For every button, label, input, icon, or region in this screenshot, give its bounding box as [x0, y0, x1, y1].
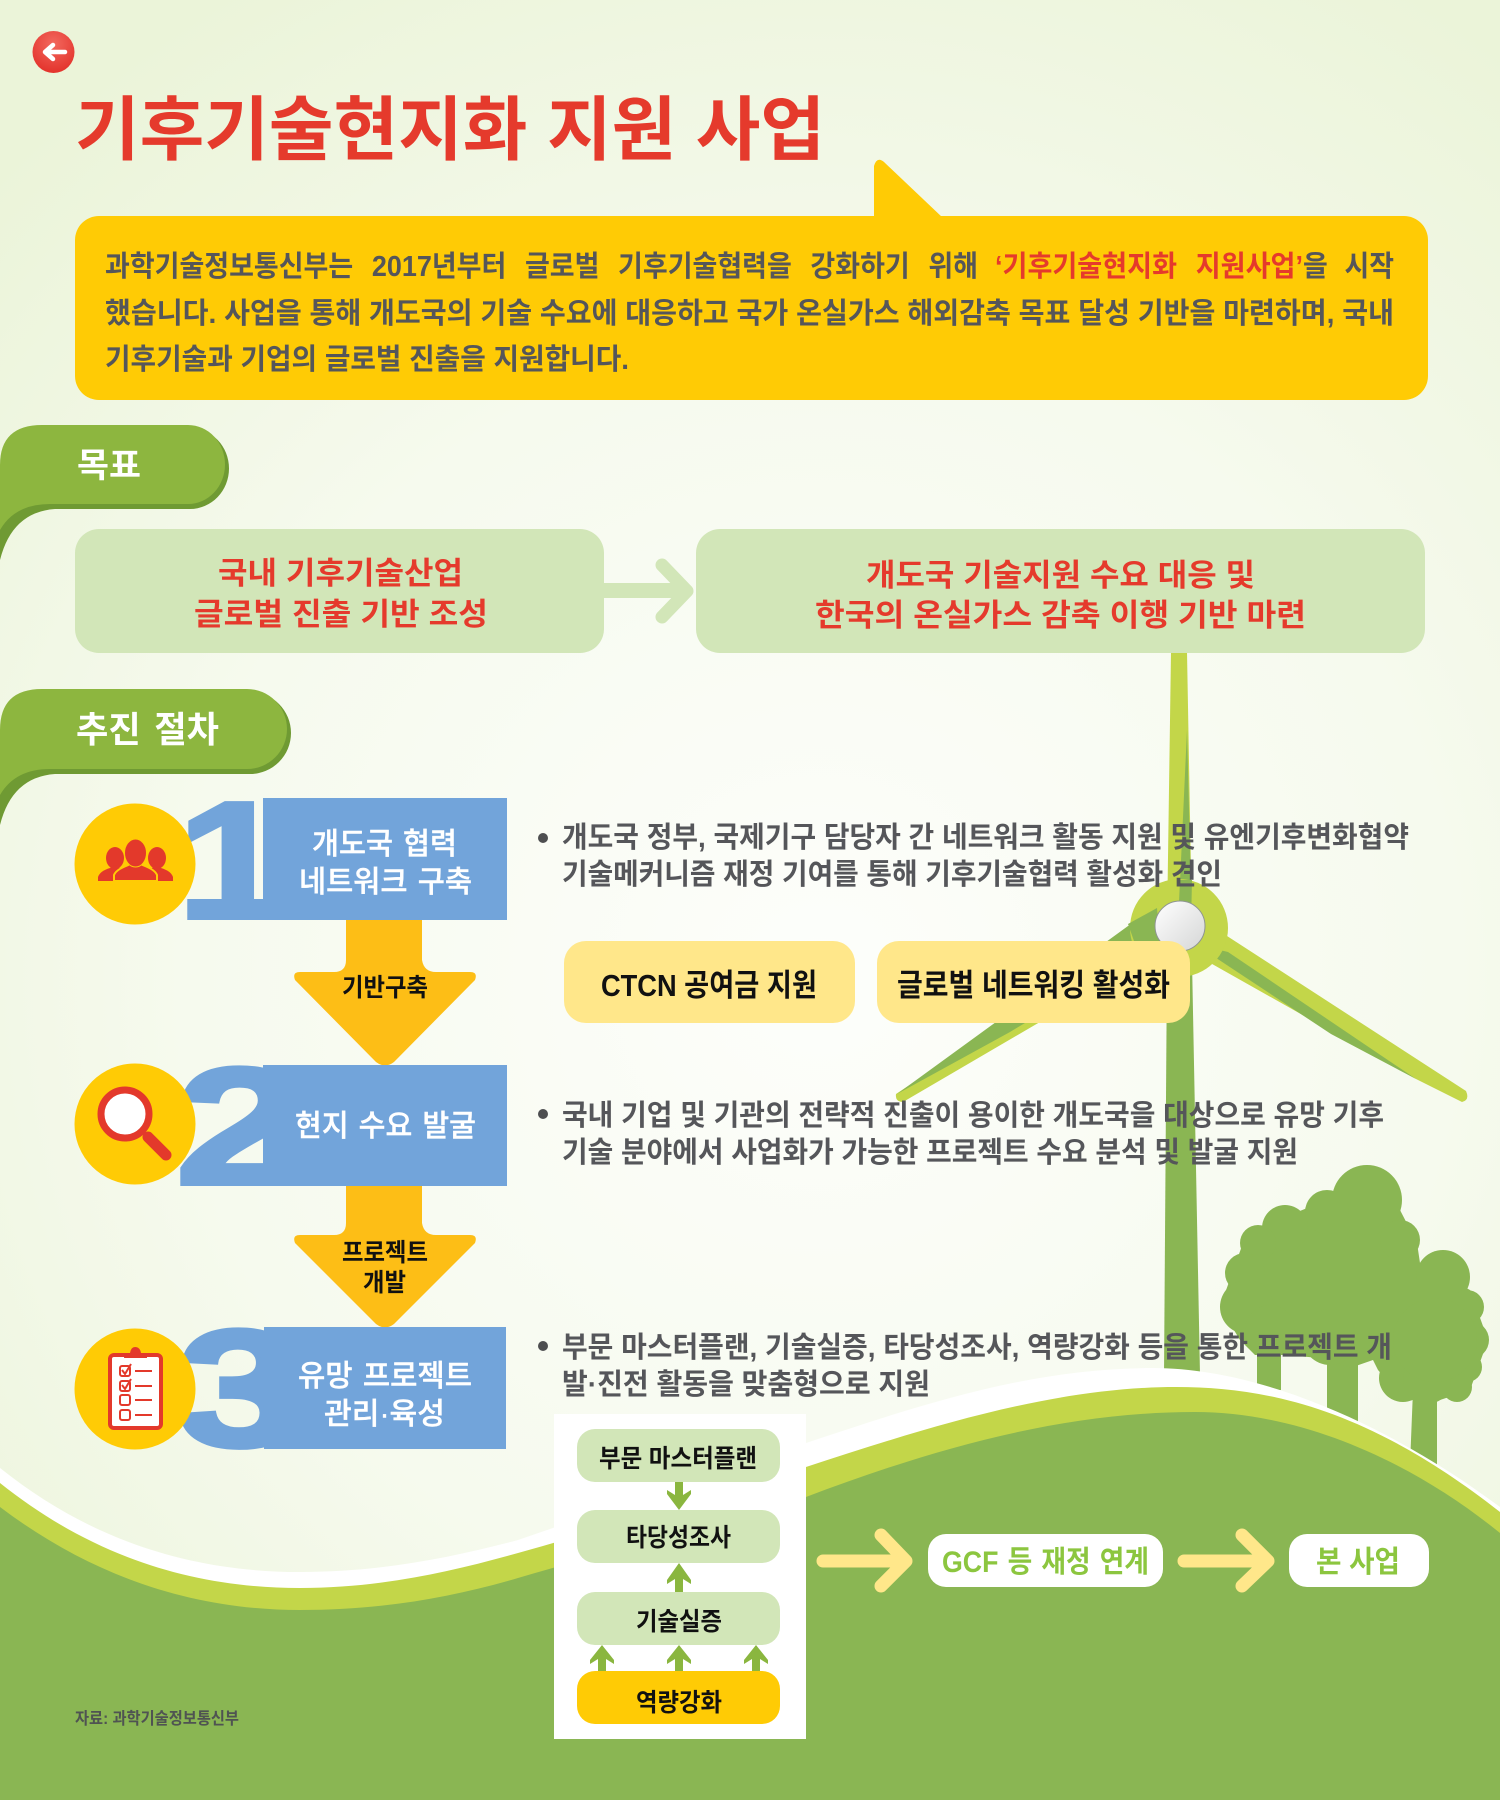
arrow: goal arrow: [604, 565, 687, 617]
stage: technology demonstration: 기술실증: [636, 1608, 722, 1636]
panel: goal box left: 글로벌 진출 기반 조성: [194, 597, 488, 632]
panel: goal box left: 국내 기후기술산업: [218, 556, 463, 591]
stage: feasibility study: 타당성조사: [626, 1524, 731, 1552]
arrow: step 1 to step 2: 기반구축: [342, 974, 428, 1002]
panel: intro speech box: 을 시작: [1303, 251, 1394, 283]
panel: intro speech box: 과학기술정보통신부는 2017년부터 글로벌 기후기술협력을 강화하기 위해: [105, 250, 978, 283]
heading: process section tab: 추진 절차: [76, 709, 219, 750]
icon: people: [74, 804, 196, 924]
arrow: step 2 to step 3: 프로젝트: [342, 1239, 428, 1267]
stage: technology demonstration: [577, 1592, 780, 1645]
stage: capacity building: [577, 1671, 780, 1724]
heading: process section tab: [0, 689, 291, 825]
icon: back button: [32, 31, 74, 73]
pill: CTCN contribution: CTCN 공여금 지원: [601, 968, 817, 1003]
pill: global networking: [877, 941, 1190, 1023]
text block: step 3 description: 발·진전 활동을 맞춤형으로 지원: [562, 1368, 930, 1401]
icon: magnifier: [74, 1064, 196, 1184]
pill: main project: 본 사업: [1316, 1546, 1400, 1579]
panel: step 3: [74, 1296, 506, 1482]
text block: step 2 description: 기술 분야에서 사업화가 가능한 프로젝트 수요 분석 및 발굴 지원: [562, 1136, 1298, 1169]
heading: goal section tab: 목표: [77, 447, 141, 485]
step 3 box: 관리·육성: [324, 1398, 445, 1431]
arrow: step 2 to step 3: 개발: [363, 1269, 406, 1297]
pill: GCF finance link: GCF 등 재정 연계: [942, 1546, 1149, 1579]
panel: goal box right: 한국의 온실가스 감축 이행 기반 마련: [815, 598, 1306, 633]
pill: GCF finance link: [928, 1534, 1163, 1587]
illustration: trees: [1220, 1165, 1489, 1465]
illustration: hills: [0, 1368, 1500, 1800]
stage: sector master plan: 부문 마스터플랜: [599, 1445, 757, 1473]
panel: goal box left: [75, 529, 604, 653]
source note: 자료: 과학기술정보통신부: [75, 1709, 239, 1728]
arrow: step 1 to step 2: [294, 918, 476, 1066]
number 1: 1: [177, 768, 289, 954]
heading: goal section tab: [0, 425, 229, 560]
text block: step 1 description: [538, 821, 1409, 891]
step 3 box: 유망 프로젝트: [298, 1360, 472, 1393]
panel: project flow diagram: [554, 1414, 806, 1739]
illustration: wind turbine: [896, 652, 1467, 1375]
text block: step 1 description: 기술메커니즘 재정 기여를 통해 기후기술협력 활성화 견인: [562, 858, 1222, 891]
panel: intro speech box: [75, 160, 1428, 400]
stage: feasibility study: [577, 1510, 780, 1563]
panel: goal box right: [696, 529, 1425, 653]
panel: step 2: [74, 1034, 507, 1220]
step 1 box: 개도국 협력: [312, 828, 457, 861]
stage: capacity building: 역량강화: [636, 1689, 722, 1717]
arrows: flow connectors: [590, 1482, 768, 1671]
panel: intro speech box: ‘기후기술현지화 지원사업’: [995, 250, 1303, 283]
arrow: to main project: [1184, 1535, 1268, 1586]
panel: intro speech box: 했습니다. 사업을 통해 개도국의 기술 수요에 대응하고 국가 온실가스 해외감축 목표 달성 기반을 마련하며, 국내: [105, 297, 1394, 330]
panel: intro speech box: 기후기술과 기업의 글로벌 진출을 지원합니다.: [105, 343, 629, 376]
icon: clipboard: [74, 1328, 196, 1450]
panel: goal box right: 개도국 기술지원 수요 대응 및: [866, 558, 1255, 593]
step 1 box: 네트워크 구축: [299, 866, 472, 899]
arrow: to GCF: [823, 1535, 906, 1586]
panel: step 1: [74, 768, 507, 954]
number 2: 2: [175, 1034, 305, 1220]
stage: sector master plan: [577, 1429, 780, 1482]
arrow: step 2 to step 3: [294, 1184, 476, 1328]
number 3: 3: [177, 1296, 302, 1482]
step 3 box: [264, 1327, 506, 1449]
text block: step 3 description: [538, 1331, 1392, 1401]
step 1 box: [263, 798, 507, 920]
step 2 box: [263, 1065, 507, 1186]
title: 기후기술현지화 지원 사업: [75, 91, 825, 169]
pill: global networking: 글로벌 네트워킹 활성화: [897, 968, 1170, 1003]
text block: step 1 description: 개도국 정부, 국제기구 담당자 간 네트워크 활동 지원 및 유엔기후변화협약: [562, 821, 1409, 854]
pill: CTCN contribution: [564, 941, 855, 1023]
text block: step 2 description: [538, 1099, 1384, 1169]
step 2 box: 현지 수요 발굴: [295, 1110, 476, 1143]
text block: step 3 description: 부문 마스터플랜, 기술실증, 타당성조사, 역량강화 등을 통한 프로젝트 개: [562, 1331, 1392, 1364]
text block: step 2 description: 국내 기업 및 기관의 전략적 진출이 용이한 개도국을 대상으로 유망 기후: [562, 1099, 1384, 1132]
pill: main project: [1289, 1534, 1429, 1587]
